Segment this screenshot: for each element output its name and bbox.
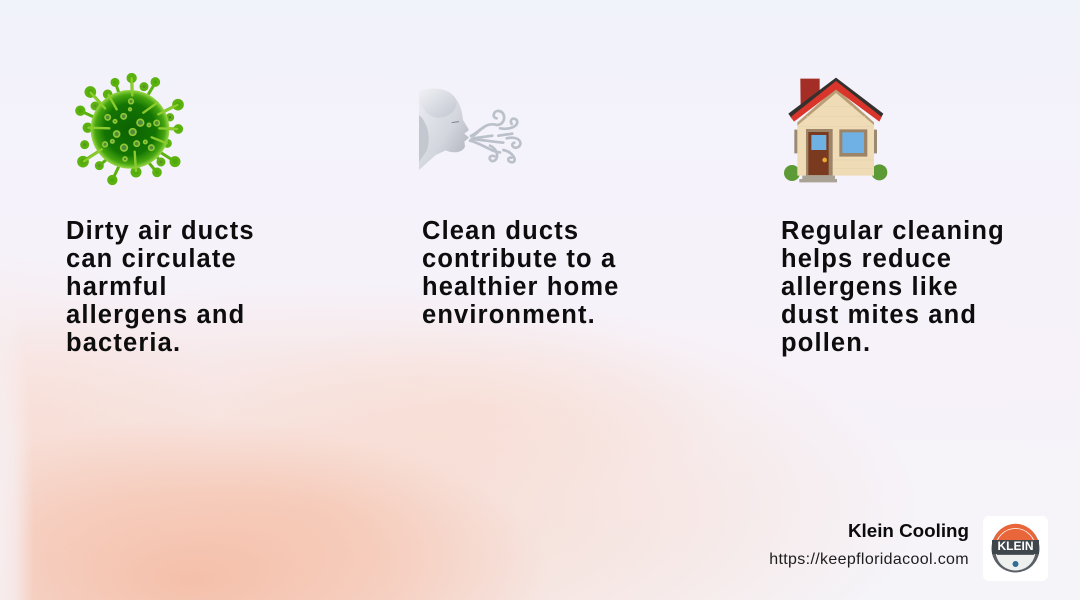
brand name: Klein Cooling [848,520,969,541]
icon: house [784,78,888,182]
text: clean ducts: Clean ducts [422,217,579,245]
logo: Klein Cooling badge [983,516,1048,581]
text: dirty air ducts [66,217,255,357]
icon: green virus [75,72,184,186]
text: clean ducts: contribute to a [422,245,616,273]
text: dirty air ducts: harmful [66,273,168,301]
text: regular cleaning: pollen. [781,329,871,357]
text: regular cleaning: allergens like [781,273,959,301]
logo: Klein Cooling badge: KLEIN [998,539,1034,553]
text: clean ducts: environment. [422,301,596,329]
text: regular cleaning [781,217,1005,357]
text: regular cleaning: Regular cleaning [781,217,1005,245]
text: dirty air ducts: Dirty air ducts [66,217,255,245]
text: regular cleaning: helps reduce [781,245,952,273]
icon: face blowing wind [419,88,522,170]
website url: https://keepfloridacool.com [769,551,969,568]
text: dirty air ducts: bacteria. [66,329,181,357]
text: clean ducts: healthier home [422,273,619,301]
text: dirty air ducts: allergens and [66,301,245,329]
text: clean ducts [422,217,619,329]
text: dirty air ducts: can circulate [66,245,237,273]
text: regular cleaning: dust mites and [781,301,977,329]
